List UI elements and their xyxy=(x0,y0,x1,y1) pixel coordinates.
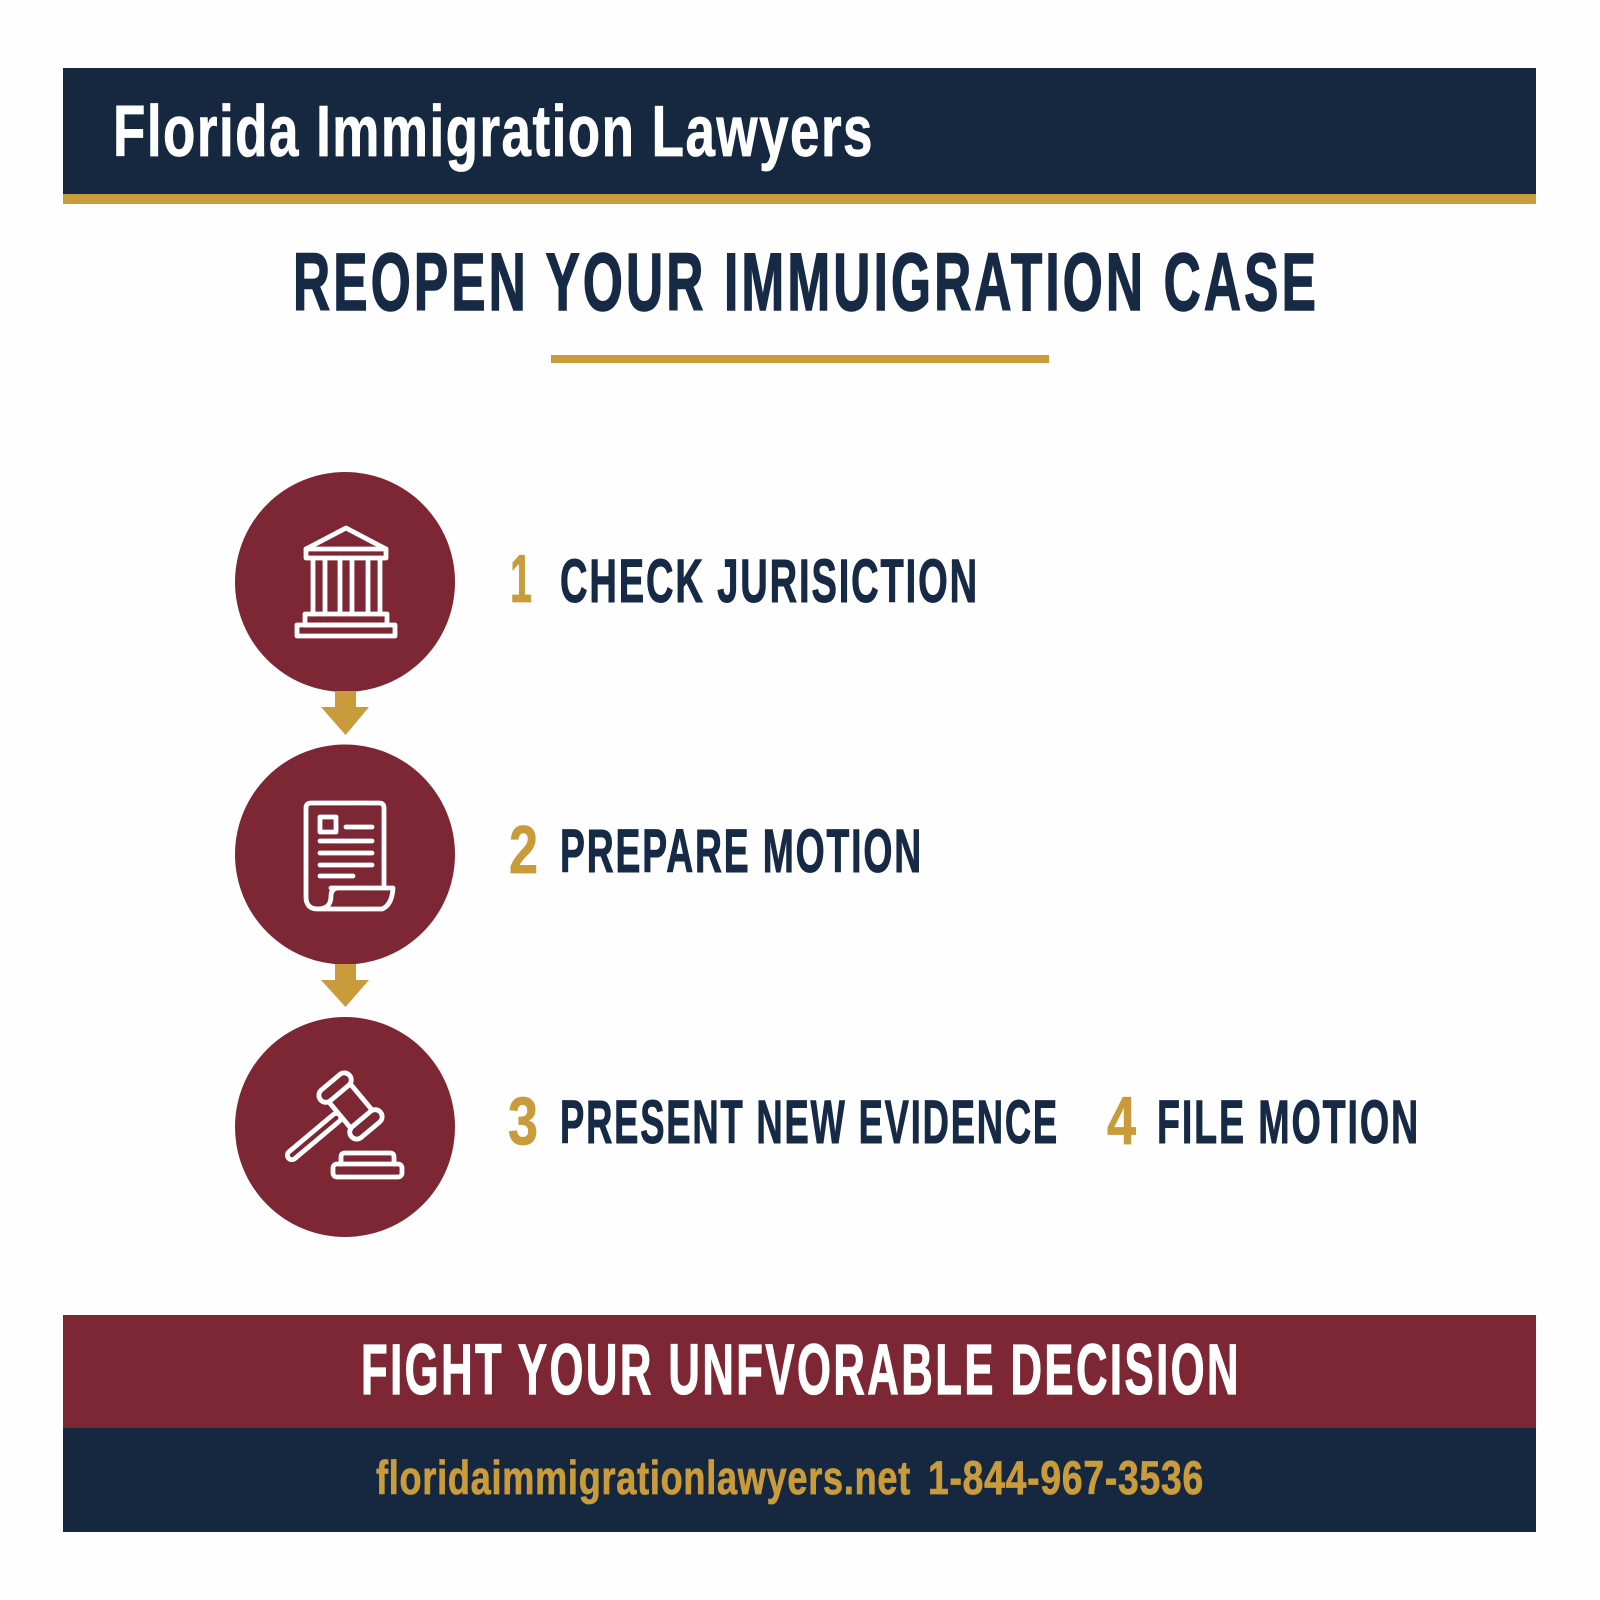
footer call-to-action banner xyxy=(63,1315,1536,1428)
icon: courthouse xyxy=(297,528,395,636)
step text 2: PREPARE MOTION xyxy=(560,817,923,885)
title underline xyxy=(551,355,1049,363)
step text 4: FILE MOTION xyxy=(1157,1088,1420,1156)
step 3 label xyxy=(508,1083,1059,1159)
header banner xyxy=(63,68,1536,204)
icon: gavel xyxy=(269,1070,402,1182)
step number 4: 4 xyxy=(1107,1083,1136,1159)
arrow 2 to 3 xyxy=(321,964,369,1007)
step circle 3 xyxy=(235,1017,455,1237)
step text 3: PRESENT NEW EVIDENCE xyxy=(560,1088,1059,1156)
phone number: 1-844-967-3536 xyxy=(928,1451,1204,1504)
step circle 2 xyxy=(235,744,455,964)
header firm name: Florida Immigration Lawyers xyxy=(113,92,874,172)
step 2 label xyxy=(509,812,923,888)
step 4 label xyxy=(1107,1083,1420,1159)
footer contact bar xyxy=(63,1428,1536,1532)
step number 2: 2 xyxy=(509,812,538,888)
arrow 1 to 2 xyxy=(321,691,369,735)
step circle 1 xyxy=(235,472,455,692)
icon: document scroll xyxy=(306,803,393,909)
step text 1: CHECK JURISICTION xyxy=(560,547,979,615)
website: floridaimmigrationlawyers.net xyxy=(376,1451,911,1504)
step 1 label xyxy=(510,541,979,617)
step number 3: 3 xyxy=(508,1083,538,1159)
step number 1: 1 xyxy=(510,541,532,617)
